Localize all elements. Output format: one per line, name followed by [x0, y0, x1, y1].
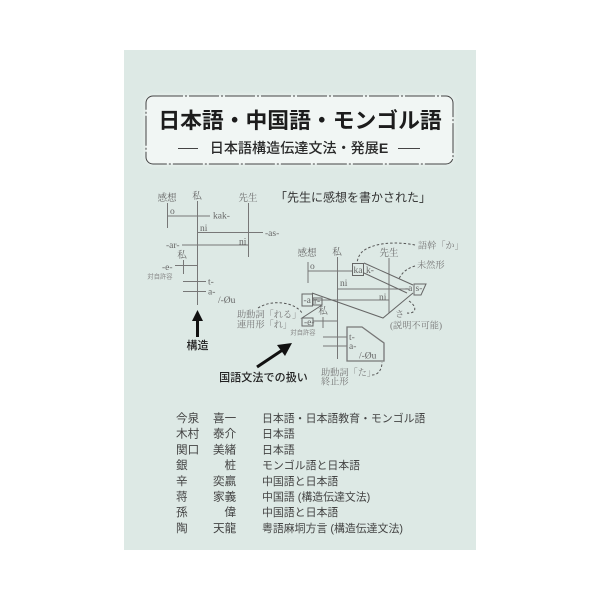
arrow: up to structure	[192, 310, 203, 337]
box: tense ending	[347, 327, 384, 361]
row 5: 奕嬴	[213, 474, 237, 488]
diagram: structure tree: kak-	[213, 212, 230, 222]
label: national grammar treatment: 国語文法での扱い	[219, 370, 308, 384]
row 1	[176, 411, 425, 425]
diagram: grammar overlay tree: r-	[314, 296, 320, 306]
row 1: 日本語・日本語教育・モンゴル語	[262, 411, 425, 425]
arrow: diagonal to grammar diagram	[257, 343, 292, 367]
caption: example sentence: 「先生に感想を書かされた」	[275, 190, 431, 204]
diagram: grammar overlay tree: 終止形	[321, 376, 349, 386]
diagram: structure tree: o	[170, 207, 175, 217]
diagram: grammar overlay tree: 対自許容	[290, 328, 316, 336]
row 6: 中国語 (構造伝達文法)	[262, 490, 370, 504]
book cover background	[124, 50, 476, 550]
diagram: grammar overlay tree: o	[310, 262, 315, 272]
box: e	[302, 305, 322, 326]
row 8: 陶	[176, 521, 188, 535]
diagram: structure tree: 私	[192, 191, 202, 202]
diagram: grammar overlay tree: k-	[366, 266, 374, 276]
diagram: structure tree: 私	[177, 250, 187, 261]
subtitle rules	[178, 148, 420, 150]
row 6	[176, 490, 370, 504]
diagram: grammar overlay tree: 語幹「か」	[418, 240, 464, 250]
diagram: structure tree: -ar-	[166, 241, 180, 251]
title panel	[146, 96, 453, 164]
diagram: grammar overlay tree: /-Øu	[359, 352, 377, 362]
diagram: grammar overlay tree: -a	[405, 284, 413, 294]
label: structure: 構造	[186, 338, 208, 352]
diagram: structure tree: 対自許容	[147, 272, 173, 280]
diagram: grammar overlay tree: 私	[318, 306, 328, 317]
diagram: grammar overlay tree: ni	[379, 293, 387, 303]
row 2: 木村	[176, 427, 200, 441]
row 2: 泰介	[213, 427, 237, 441]
row 1: 今泉	[176, 411, 200, 425]
diagram: structure tree: /-Øu	[218, 296, 236, 306]
diagram: grammar overlay tree: 未然形	[417, 259, 445, 270]
diagram: grammar overlay tree: s-	[416, 284, 422, 294]
diagram: grammar overlay tree: 連用形「れ」	[237, 318, 292, 330]
row 5: 辛	[176, 475, 188, 488]
row 2	[176, 427, 295, 441]
dashed callouts	[258, 243, 415, 375]
diagram: structure tree: a-	[208, 288, 215, 298]
diagram: structure tree: -e-	[162, 263, 173, 273]
diagram: structure tree: 感想	[157, 192, 177, 204]
diagram: grammar overlay tree: t-	[349, 333, 355, 343]
row 7: 偉	[224, 506, 236, 519]
diagram: structure tree: ni	[239, 238, 247, 248]
diagram: grammar overlay tree: a-	[349, 342, 356, 352]
diagram: grammar overlay tree: 感想	[297, 247, 317, 259]
box: ka	[352, 264, 364, 276]
heading: main title: 日本語・中国語・モンゴル語	[158, 108, 442, 133]
box: ar	[302, 294, 312, 306]
row 4: 銀	[176, 458, 188, 472]
author list	[176, 411, 425, 535]
row 7: 孫	[176, 506, 188, 519]
box: as stem	[414, 284, 426, 295]
row 7	[176, 505, 338, 519]
diagram: grammar overlay tree: 私	[332, 247, 342, 258]
row 3	[176, 442, 295, 456]
row 6: 家義	[213, 490, 237, 504]
heading: subtitle: 日本語構造伝達文法・発展E	[210, 140, 388, 156]
row 8: 天龍	[213, 521, 237, 535]
row 8: 粤語麻垌方言 (構造伝達文法)	[262, 521, 403, 535]
diagram: structure tree: t-	[208, 278, 214, 288]
diagram: grammar overlay tree: -a	[304, 296, 312, 306]
row 7: 中国語と日本語	[262, 505, 338, 519]
diagram: grammar overlay tree: 助動詞「れる」	[237, 308, 301, 320]
diagram: grammar overlay tree: さ	[395, 309, 404, 319]
diagram: structure tree: -as-	[265, 229, 279, 239]
diagram: grammar overlay tree: 先生	[379, 247, 399, 259]
row 6: 蒋	[176, 490, 188, 504]
row 5	[176, 474, 338, 488]
row 1: 喜一	[213, 412, 237, 425]
row 3: 美緒	[213, 442, 237, 456]
diagram: grammar overlay tree: -e-	[304, 318, 315, 328]
row 4: モンゴル語と日本語	[262, 458, 360, 472]
row 2: 日本語	[262, 427, 295, 441]
row 8	[176, 521, 403, 535]
row 3: 日本語	[262, 442, 295, 456]
diagram: grammar overlay tree: ni	[340, 279, 348, 289]
row 5: 中国語と日本語	[262, 474, 338, 488]
diagram: grammar overlay tree: 助動詞「た」	[321, 366, 376, 378]
diagram: grammar overlay tree: (説明不可能)	[390, 320, 442, 330]
diagram: grammar overlay tree	[237, 240, 464, 386]
diagram: structure tree: 先生	[238, 192, 258, 204]
diagram: structure tree	[147, 191, 279, 306]
row 4	[176, 458, 360, 472]
diagram: grammar overlay tree: ka	[354, 266, 363, 276]
row 4: 桩	[224, 458, 236, 472]
row 3: 関口	[176, 443, 199, 456]
diagram: structure tree: ni	[200, 224, 208, 234]
